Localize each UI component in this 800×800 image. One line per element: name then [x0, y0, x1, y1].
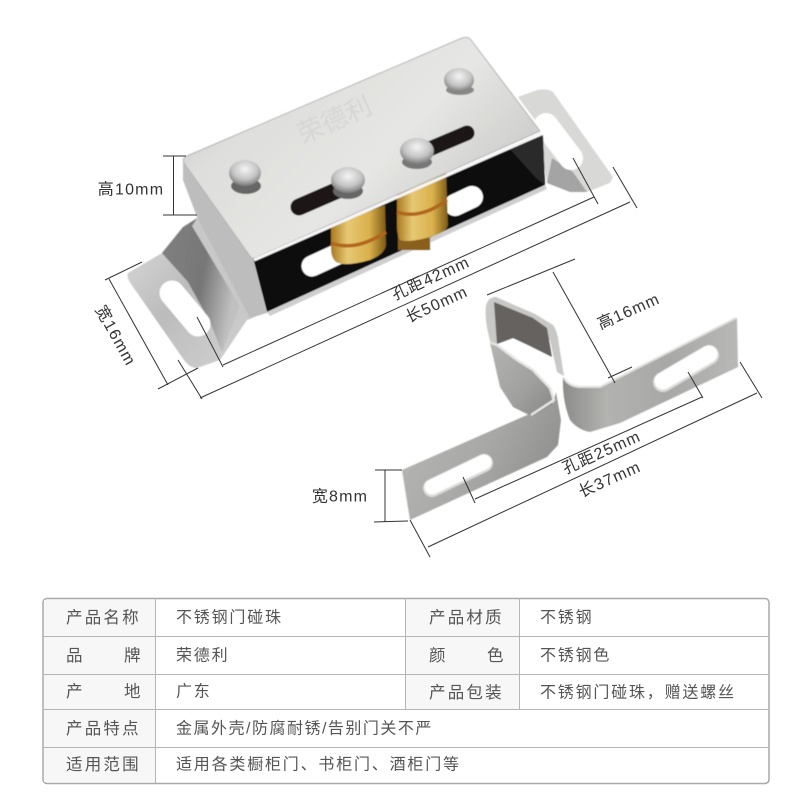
row: features: [66, 719, 433, 738]
length 37mm: [410, 362, 762, 557]
row: origin and packaging: 产: [66, 682, 85, 701]
inner side wall: [510, 135, 545, 185]
width 8mm: [312, 470, 408, 522]
width 16mm: [91, 262, 198, 389]
right mounting wing: [518, 89, 613, 192]
left side folded wall: [183, 160, 267, 318]
row: product name and material: 产品材质: [429, 608, 504, 627]
row: applicable range: [66, 755, 461, 774]
height 16mm: [487, 259, 663, 383]
row: brand and color: 不锈钢色: [540, 646, 611, 664]
row: origin and packaging: 不锈钢门碰珠，赠送螺丝: [540, 684, 736, 702]
row: product name and material: 不锈钢门碰珠: [176, 608, 283, 626]
row: brand and color: 色: [487, 646, 506, 665]
height 10mm: 高10mm: [98, 180, 164, 198]
length 37mm: 长37mm: [576, 458, 644, 501]
front band top rim: [491, 343, 554, 415]
back loop rim: [486, 297, 564, 376]
row: product name and material: [66, 608, 593, 627]
hole spacing 25mm: [463, 372, 703, 503]
strike slots: [432, 354, 709, 488]
brass roller right: [397, 170, 448, 250]
width 16mm: 宽16mm: [91, 302, 139, 369]
row: applicable range: 适用范围: [66, 755, 141, 774]
hole spacing 42mm: 孔距42mm: [389, 253, 473, 304]
length 50mm: [178, 167, 637, 399]
front edge highlight: [254, 134, 541, 260]
table frame: [43, 598, 769, 784]
interior slot openings: [312, 197, 472, 266]
right tab: [563, 318, 738, 432]
left tab: [402, 392, 561, 520]
hole spacing 42mm: [197, 158, 598, 367]
dimension annotations: [91, 156, 762, 557]
width 8mm: 宽8mm: [312, 488, 368, 506]
row: features: 金属外壳/防腐耐锈/告别门关不严: [176, 720, 433, 738]
front band: [490, 343, 553, 416]
small strike plate photo: [402, 297, 738, 520]
embossed brand mark: 荣德利: [293, 90, 376, 149]
label cell shading: [44, 600, 519, 782]
row: product name and material: 产品名称: [66, 608, 141, 627]
loop dark inside: [494, 302, 552, 357]
hole spacing 25mm: 孔距25mm: [560, 427, 644, 478]
row: origin and packaging: 广东: [176, 682, 212, 700]
row: features: 产品特点: [66, 719, 141, 738]
row: product name and material: 不锈钢: [540, 608, 593, 626]
row: origin and packaging: [66, 682, 736, 702]
grid lines: [43, 598, 769, 783]
row: brand and color: 荣德利: [176, 646, 229, 664]
row: brand and color: 牌: [124, 646, 143, 665]
length 50mm: 长50mm: [403, 283, 471, 326]
row: brand and color: [66, 646, 611, 665]
large latch photo: [127, 37, 613, 368]
top plate: [183, 37, 540, 258]
dark interior: [253, 135, 545, 312]
specification table: [43, 598, 769, 784]
left mounting wing: [127, 217, 263, 368]
right tab top rim: [564, 318, 736, 387]
row: origin and packaging: 地: [124, 682, 143, 701]
row: origin and packaging: 产品包装: [429, 683, 504, 702]
brass roller left: [331, 205, 386, 264]
plate slots: [299, 133, 467, 207]
lower white rim: [267, 185, 547, 316]
row: applicable range: 适用各类橱柜门、书柜门、酒柜门等: [176, 756, 461, 774]
height 10mm: [98, 156, 197, 215]
rivets: [229, 68, 474, 199]
height 16mm: 高16mm: [595, 290, 663, 333]
row: brand and color: 品: [66, 647, 85, 665]
row: brand and color: 颜: [429, 646, 448, 665]
